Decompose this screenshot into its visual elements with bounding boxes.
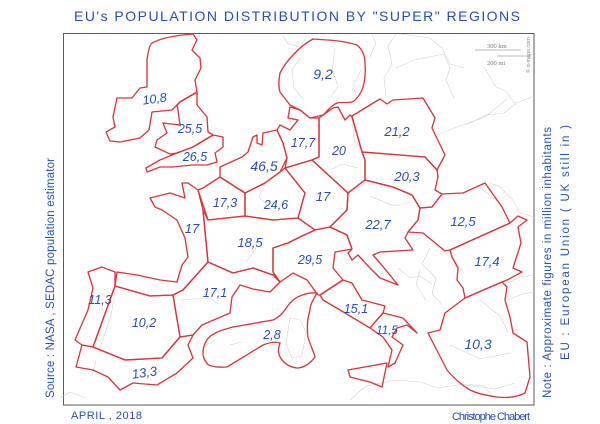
region: Austria, Czechia and Croatia 22,7 bbox=[330, 180, 420, 285]
region: Portugal and Galicia 11,3: 11,3 bbox=[88, 293, 112, 307]
region: eastern Germany 20: 20 bbox=[331, 144, 346, 158]
author: Christophe Chabert bbox=[452, 411, 530, 423]
region: eastern Germany 20 bbox=[312, 107, 365, 193]
region: northern Italy and Switzerland 29,5 bbox=[273, 227, 352, 295]
region: Scandinavia 9,2: 9,2 bbox=[313, 66, 333, 82]
region: southern France and Catalonia 17,1 bbox=[173, 262, 280, 337]
region: Hungary and Romania north 12,5: 12,5 bbox=[450, 214, 476, 229]
EU definition note: EU : European Union ( UK still in ) bbox=[560, 125, 572, 360]
region: Sicily bbox=[348, 363, 387, 387]
region: central Italy 15,1 bbox=[320, 280, 385, 328]
region: northern Italy and Switzerland 29,5: 29,5 bbox=[297, 253, 322, 267]
region: northern England and Wales 25,5 bbox=[155, 92, 213, 154]
region: southern Poland 20,3: 20,3 bbox=[393, 169, 420, 184]
map scale bbox=[475, 43, 531, 67]
region: southern Germany 17: 17 bbox=[316, 189, 331, 204]
title: EU's POPULATION DISTRIBUTION BY "SUPER" REGIONS bbox=[74, 8, 520, 24]
map frame bbox=[64, 34, 534, 405]
region: northern Poland 21,2: 21,2 bbox=[383, 124, 410, 139]
region: northern Germany 17,7 bbox=[277, 107, 319, 168]
map scale: 200 mi bbox=[487, 60, 505, 67]
region: southern Italy 11,5 bbox=[370, 313, 417, 367]
note on figures: Note : Approximate figures in million inhabitants bbox=[542, 127, 554, 398]
region: northern England and Wales 25,5: 25,5 bbox=[177, 122, 202, 136]
map regions bbox=[75, 34, 530, 398]
region: Greece 10,3: 10,3 bbox=[464, 336, 492, 352]
region: north-eastern France 24,6: 24,6 bbox=[263, 198, 288, 212]
region: Austria, Czechia and Croatia 22,7: 22,7 bbox=[364, 217, 391, 232]
region: southern Spain 13,3: 13,3 bbox=[131, 363, 159, 382]
region: Portugal and Galicia 11,3 bbox=[75, 267, 115, 347]
region: central Spain 10,2: 10,2 bbox=[132, 316, 156, 330]
region: southern England 26,5 bbox=[146, 135, 223, 172]
map credit: © d-maps.com bbox=[525, 37, 532, 73]
region: Scandinavia 9,2 bbox=[279, 39, 365, 118]
region: southern Italy 11,5: 11,5 bbox=[376, 325, 398, 337]
region: southern Poland 20,3 bbox=[362, 152, 442, 208]
source note: Source : NASA , SEDAC population estimator bbox=[45, 158, 57, 398]
region: Scotland and Ireland 10,8 bbox=[106, 34, 201, 142]
region: southern England 26,5: 26,5 bbox=[182, 150, 207, 164]
region: Hungary and Romania north 12,5 bbox=[408, 183, 510, 251]
region: central Italy 15,1: 15,1 bbox=[344, 302, 368, 316]
region: Mediterranean islands 2,8 bbox=[203, 293, 317, 368]
region: Romania and Bulgaria 17,4 bbox=[450, 216, 527, 298]
region: northern France 17,3: 17,3 bbox=[213, 196, 237, 210]
region: Romania and Bulgaria 17,4: 17,4 bbox=[474, 254, 500, 269]
region: central Spain 10,2 bbox=[93, 286, 180, 360]
region: Mediterranean islands 2,8: 2,8 bbox=[262, 328, 281, 342]
date: APRIL , 2018 bbox=[71, 410, 142, 422]
region: Greece 10,3 bbox=[428, 282, 530, 398]
region: northern Germany 17,7: 17,7 bbox=[291, 136, 316, 150]
region: southern Spain 13,3 bbox=[76, 335, 193, 390]
region: western France 17: 17 bbox=[185, 221, 200, 236]
region: north-eastern France 24,6 bbox=[245, 168, 305, 220]
region: central France 18,5: 18,5 bbox=[237, 235, 263, 250]
region: southern France and Catalonia 17,1: 17,1 bbox=[203, 286, 227, 300]
region: western France 17 bbox=[115, 183, 208, 296]
region: northern Poland 21,2 bbox=[352, 98, 445, 170]
region: southern Germany 17 bbox=[285, 160, 348, 230]
region: central France 18,5 bbox=[203, 210, 315, 282]
region: Low Countries and western Germany 46,5 bbox=[220, 130, 287, 193]
region: Scotland and Ireland 10,8: 10,8 bbox=[142, 90, 168, 108]
map scale: 300 km bbox=[487, 43, 507, 50]
region: northern France 17,3 bbox=[198, 177, 245, 220]
region: Low Countries and western Germany 46,5: 46,5 bbox=[250, 158, 278, 174]
